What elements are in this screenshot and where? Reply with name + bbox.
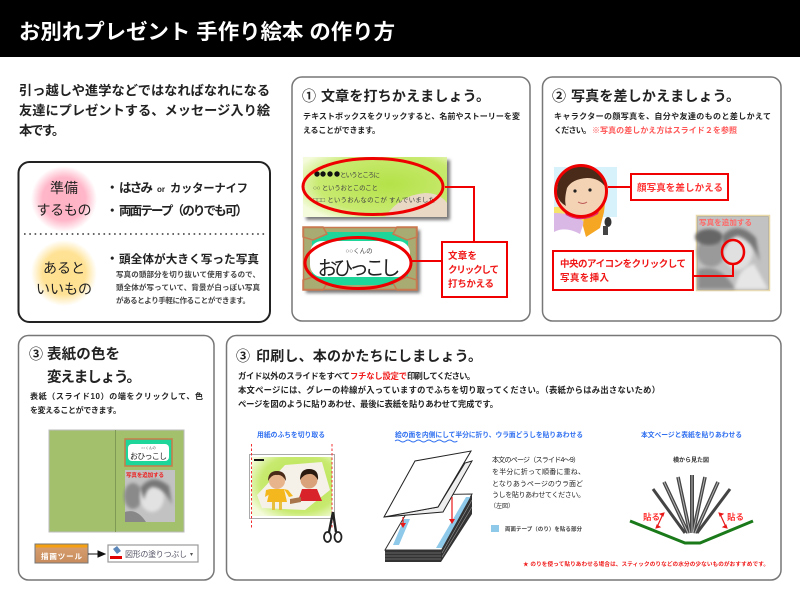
badge: optional: いいもの: [36, 281, 92, 297]
badge: required: [31, 166, 97, 232]
arrow: to fill command: [88, 551, 105, 557]
callout: replace face photo: [608, 174, 728, 200]
callout: click to retype: 打ちかえる: [448, 278, 494, 290]
figure: attach cover to pages: [630, 430, 753, 543]
panel: materials: [18, 162, 270, 322]
list: required items: or: [157, 185, 165, 194]
callout: click center icon: [553, 251, 733, 290]
figure: fold and glue pages: 絵の面を内側にして半分に折り、ウラ面どうしを貼りあわせる: [395, 430, 583, 439]
list: optional item: があるとより手軽に作ることができます。: [116, 295, 250, 305]
figure: trim paper edges: 用紙のふちを切り取る: [257, 430, 325, 439]
tool: drawing tools tab: [35, 544, 88, 563]
image: character with face photo: [554, 166, 617, 237]
heading: step 2: 写真を差しかえましょう。: [571, 88, 740, 104]
body text: step 2: キャラクターの顔写真を、自分や友達のものと差しかえて: [554, 111, 771, 121]
list: optional item: 頭全体が写っていて、背景が白っぽい写真: [116, 282, 260, 292]
panel: step 3 cover color: [18, 336, 214, 580]
note: glue advice: ★ のりを使って貼りあわせる場合は、スティックのりなどの水分の少ないものがおすすめです。: [523, 560, 769, 568]
figure: fold and glue pages: [384, 430, 583, 562]
figure: attach cover to pages: 貼る: [643, 512, 660, 522]
image: story page sample: □□□ というおんなのこが すんでいました: [313, 195, 435, 204]
body text: print: [238, 371, 660, 409]
body text: print: ページを図のように貼りあわせ、最後に表紙を貼りあわせて完成です。: [238, 399, 498, 409]
intro text: 友達にプレゼントする、メッセージ入り絵: [19, 102, 271, 118]
tool: shape fill button: ▾: [190, 552, 193, 558]
badge: optional: [31, 240, 97, 306]
text: page gluing instructions: となりあうページのウラ面ど: [492, 480, 583, 488]
heading: step 1: 文章を打ちかえましょう。: [321, 88, 490, 104]
heading: step 1: ①: [302, 88, 316, 104]
heading: print: 印刷し、本のかたちにしましょう。: [256, 348, 482, 364]
callout: click to retype: 文章を: [448, 250, 477, 262]
list: required items: ・: [106, 181, 119, 195]
body text: step 2: ※写真の差しかえ方はスライド２を参照: [592, 125, 737, 135]
icon: scissors: [324, 512, 342, 542]
image: green cover spread: ○○くんの: [141, 445, 156, 450]
tool: drawing tools tab: 描画ツール: [41, 551, 82, 561]
badge: optional: あると: [43, 260, 85, 276]
heading: step 3 cover: [29, 345, 141, 386]
body text: step 3 cover: を変えることができます。: [30, 405, 121, 415]
badge: required: 準備: [50, 180, 78, 196]
text: page gluing instructions: （左図）: [490, 502, 514, 510]
image: green cover spread: おひっこし: [130, 452, 167, 461]
legend: double-sided tape area: 両面テープ（のり）を貼る部分: [505, 525, 582, 533]
heading: step 3 cover: 表紙の色を: [47, 345, 120, 363]
list: optional item: 写真の頭部分を切り抜いて使用するので、: [116, 269, 260, 279]
tool: shape fill button: [108, 545, 198, 562]
figure: attach cover to pages: 貼る: [727, 512, 744, 522]
body text: print: 印刷してください。: [407, 371, 475, 381]
image: cover title sample: ○○くんの: [345, 247, 373, 255]
image: grey photo placeholder: [695, 216, 770, 290]
panel: step 3 print and bind: [226, 336, 781, 580]
body text: step 1: [303, 111, 520, 135]
callout: click center icon: 中央のアイコンをクリックして: [560, 258, 686, 270]
badge: required: するもの: [36, 202, 92, 218]
intro text: [19, 82, 271, 138]
body text: step 2: [554, 111, 771, 135]
tool: shape fill button: 図形の塗りつぶし: [125, 549, 187, 559]
callout: replace face photo: 顔写真を差しかえる: [637, 182, 723, 194]
text: page gluing instructions: [490, 455, 585, 510]
body text: print: 本文ページには、グレーの枠線が入っていますのでふちを切り取ってください。（表紙からはみ出さないため）: [238, 385, 660, 395]
list: optional item: ・: [106, 252, 119, 266]
image: grey photo placeholder: 写真を追加する: [699, 217, 752, 227]
heading: step 3 cover: 変えましょう。: [47, 369, 141, 386]
list: optional item: [106, 252, 260, 305]
figure: trim paper edges: [250, 430, 334, 528]
body text: step 3 cover: 表紙（スライド10）の端をクリックして、色: [30, 391, 203, 401]
intro text: 本です。: [19, 122, 65, 138]
image: story page sample: [303, 157, 450, 220]
heading: step 2: ②: [552, 88, 566, 104]
callout: click center icon: 写真を挿入: [560, 272, 609, 284]
list: optional item: 頭全体が大きく写った写真: [119, 252, 259, 266]
image: story page sample: というところに: [340, 171, 380, 179]
list: required items: [106, 181, 248, 218]
heading: step 3 cover: ③: [29, 346, 43, 362]
body text: step 1: テキストボックスをクリックすると、名前やストーリーを変: [303, 111, 520, 121]
panel: step 1 retype text: [292, 77, 530, 321]
list: required items: ・: [106, 204, 119, 218]
header bar: お別れプレゼント 手作り絵本 の作り方: [19, 20, 395, 44]
callout: click to retype: [412, 187, 507, 297]
body text: step 3 cover: [30, 391, 203, 415]
image: green cover spread: 写真を追加する: [126, 471, 164, 479]
image: green cover spread: [49, 430, 184, 532]
body text: print: ガイド以外のスライドをすべて: [238, 371, 350, 381]
text: page gluing instructions: 本文のページ（スライド4～9）: [492, 455, 580, 464]
list: required items: 両面テープ（のりでも可）: [119, 204, 248, 218]
callout: click to retype: クリックして: [448, 265, 499, 276]
image: cover title sample: おひっこし: [318, 258, 400, 280]
panel: step 2 replace photo: [542, 77, 781, 321]
figure: attach cover to pages: 横から見た図: [673, 456, 709, 464]
body text: print: フチなし設定で: [350, 371, 407, 381]
figure: attach cover to pages: 本文ページと表紙を貼りあわせる: [641, 430, 742, 439]
image: cover title sample: [303, 227, 420, 293]
text: page gluing instructions: を半分に折って順番に重ね、: [492, 467, 585, 476]
body text: step 2: ください。: [554, 126, 591, 135]
heading: print: ③: [236, 348, 250, 364]
image: story page sample: ○○ というおとこのこと: [313, 184, 378, 192]
intro text: 引っ越しや進学などではなればなれになる: [19, 82, 270, 98]
legend: double-sided tape area: [491, 525, 582, 533]
body text: step 1: えることができます。: [303, 125, 380, 135]
text: page gluing instructions: うしを貼りあわせてください。: [492, 490, 585, 499]
header bar: [0, 0, 800, 57]
list: required items: カッターナイフ: [170, 182, 248, 195]
list: required items: はさみ: [119, 181, 153, 195]
